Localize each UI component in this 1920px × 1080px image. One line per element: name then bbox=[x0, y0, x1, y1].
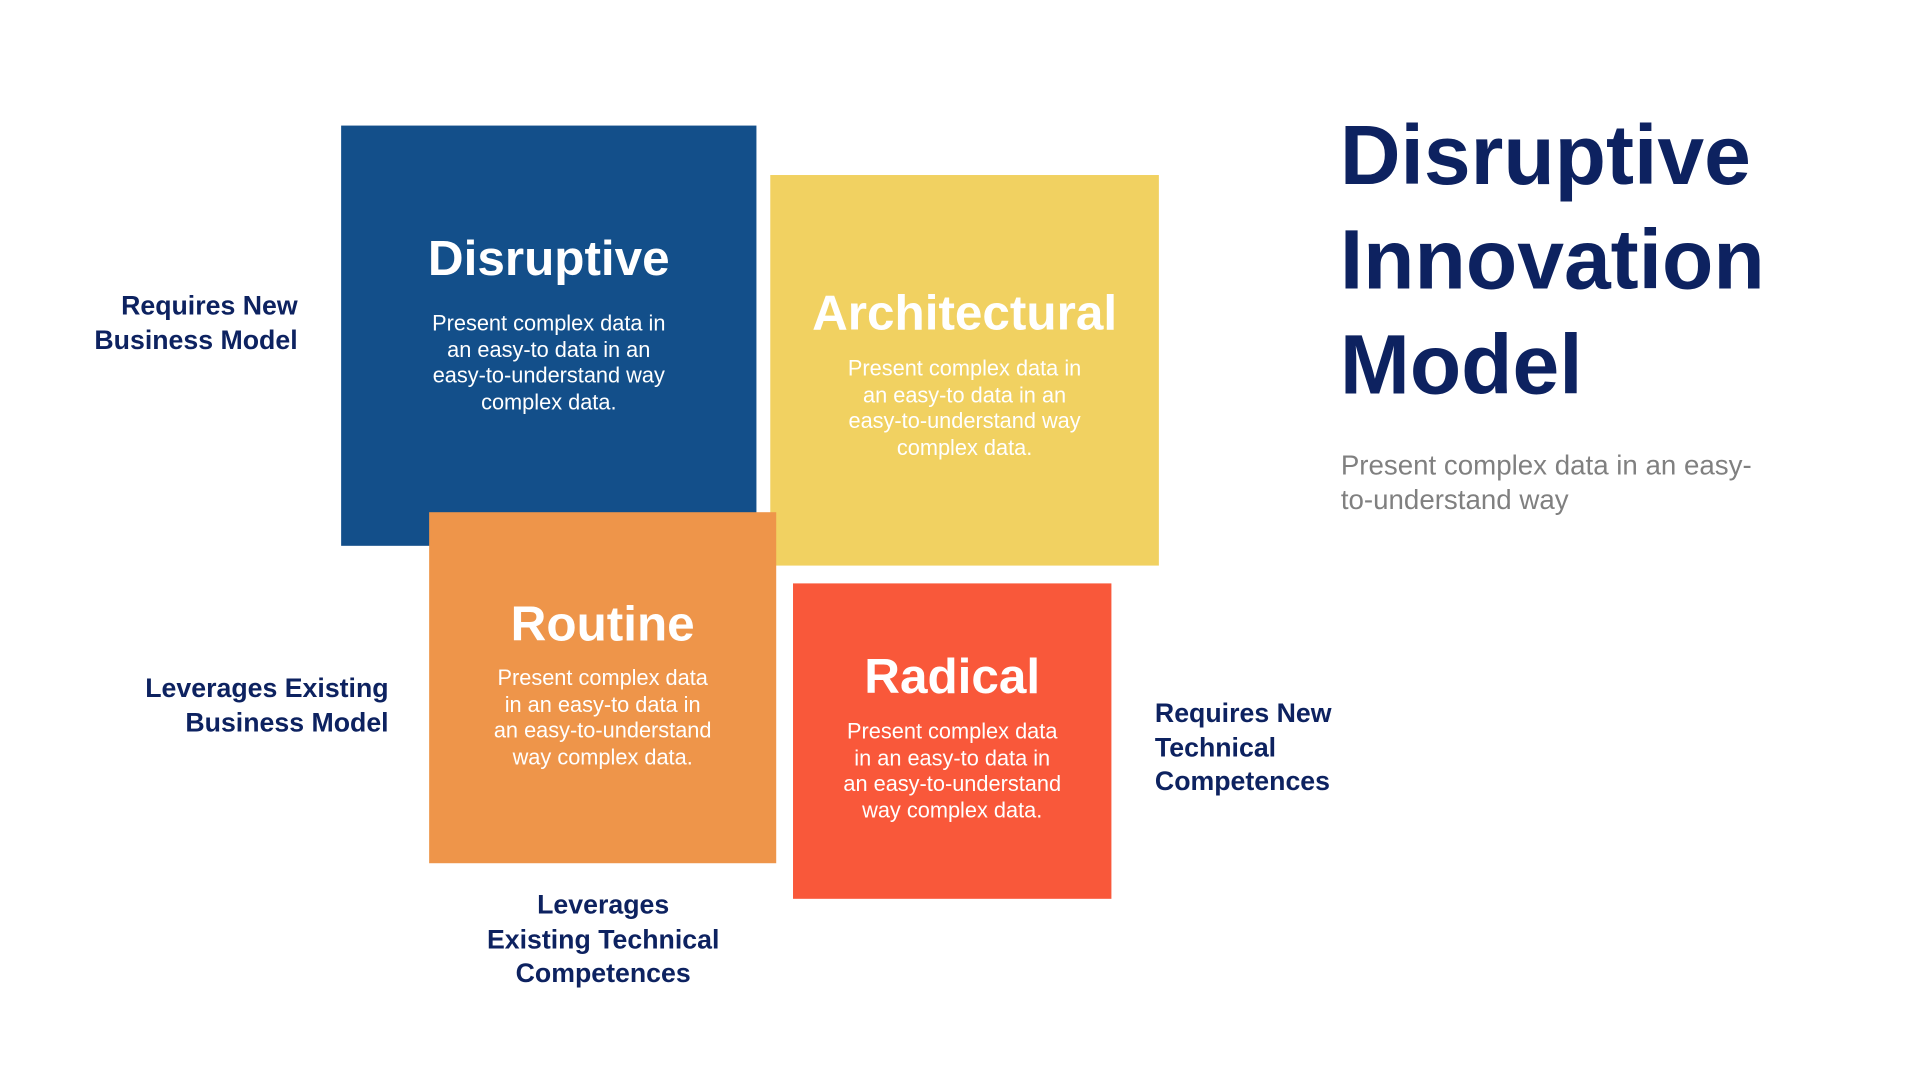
text: Routine body: an easy-to-understand bbox=[494, 718, 712, 743]
text: Radical body bbox=[843, 719, 1061, 822]
label: Requires New Technical Competences: Technical bbox=[1155, 732, 1276, 762]
label: Leverages Existing Technical Competences: Existing Technical bbox=[487, 924, 719, 954]
label: Leverages Existing Business Model bbox=[145, 673, 389, 737]
label: Leverages Existing Technical Competences bbox=[487, 890, 719, 988]
text: Architectural body: an easy-to data in an bbox=[863, 382, 1066, 407]
label: Requires New Technical Competences: Requires New bbox=[1155, 698, 1331, 728]
text: Disruptive body bbox=[432, 310, 665, 414]
text: Disruptive body: easy-to-understand way bbox=[433, 363, 665, 388]
label: Requires New Technical Competences bbox=[1155, 698, 1332, 796]
text: Radical body: way complex data. bbox=[862, 797, 1042, 822]
square: Architectural bbox=[770, 175, 1159, 566]
heading: Routine: Routine bbox=[511, 596, 695, 652]
text: Architectural body bbox=[848, 356, 1081, 460]
text: Architectural body: Present complex data in bbox=[848, 356, 1081, 381]
label: Requires New Technical Competences: Competences bbox=[1155, 766, 1330, 796]
label: Leverages Existing Technical Competences: Competences bbox=[516, 958, 691, 988]
heading: Radical: Radical bbox=[864, 649, 1040, 704]
title bbox=[1340, 109, 1765, 412]
text: Disruptive body: an easy-to data in an bbox=[447, 337, 650, 361]
title: Disruptive bbox=[1340, 109, 1751, 203]
text: Radical body: Present complex data bbox=[847, 719, 1057, 744]
text: Routine body bbox=[494, 665, 712, 769]
text: Routine body: in an easy-to data in bbox=[505, 692, 701, 716]
text: Routine body: Present complex data bbox=[497, 665, 708, 690]
text: Radical body: an easy-to-understand bbox=[843, 771, 1061, 796]
text: Routine body: way complex data. bbox=[513, 744, 693, 769]
label: Leverages Existing Business Model: Business Model bbox=[185, 707, 389, 737]
label: Leverages Existing Technical Competences: Leverages bbox=[537, 890, 669, 920]
square: Routine bbox=[429, 512, 776, 863]
title: Model bbox=[1340, 318, 1583, 412]
text: Disruptive body: complex data. bbox=[481, 389, 617, 414]
label: Requires New Business Model: Requires New bbox=[121, 291, 298, 320]
label: Requires New Business Model bbox=[94, 291, 298, 354]
heading: Architectural: Architectural bbox=[812, 285, 1117, 340]
text: Disruptive body: Present complex data in bbox=[432, 310, 665, 335]
subtitle: Present complex data in an easy- bbox=[1341, 450, 1752, 481]
text: Radical body: in an easy-to data in bbox=[854, 745, 1050, 770]
square: Disruptive bbox=[341, 126, 756, 546]
text: Architectural body: easy-to-understand way bbox=[848, 408, 1081, 433]
label: Leverages Existing Business Model: Leverages Existing bbox=[145, 673, 389, 703]
heading: Disruptive: Disruptive bbox=[428, 230, 670, 286]
subtitle: to-understand way bbox=[1341, 485, 1569, 515]
label: Requires New Business Model: Business Model bbox=[94, 325, 298, 354]
subtitle bbox=[1341, 450, 1752, 515]
text: Architectural body: complex data. bbox=[897, 435, 1032, 459]
title: Innovation bbox=[1340, 214, 1765, 308]
square: Radical bbox=[793, 583, 1111, 899]
